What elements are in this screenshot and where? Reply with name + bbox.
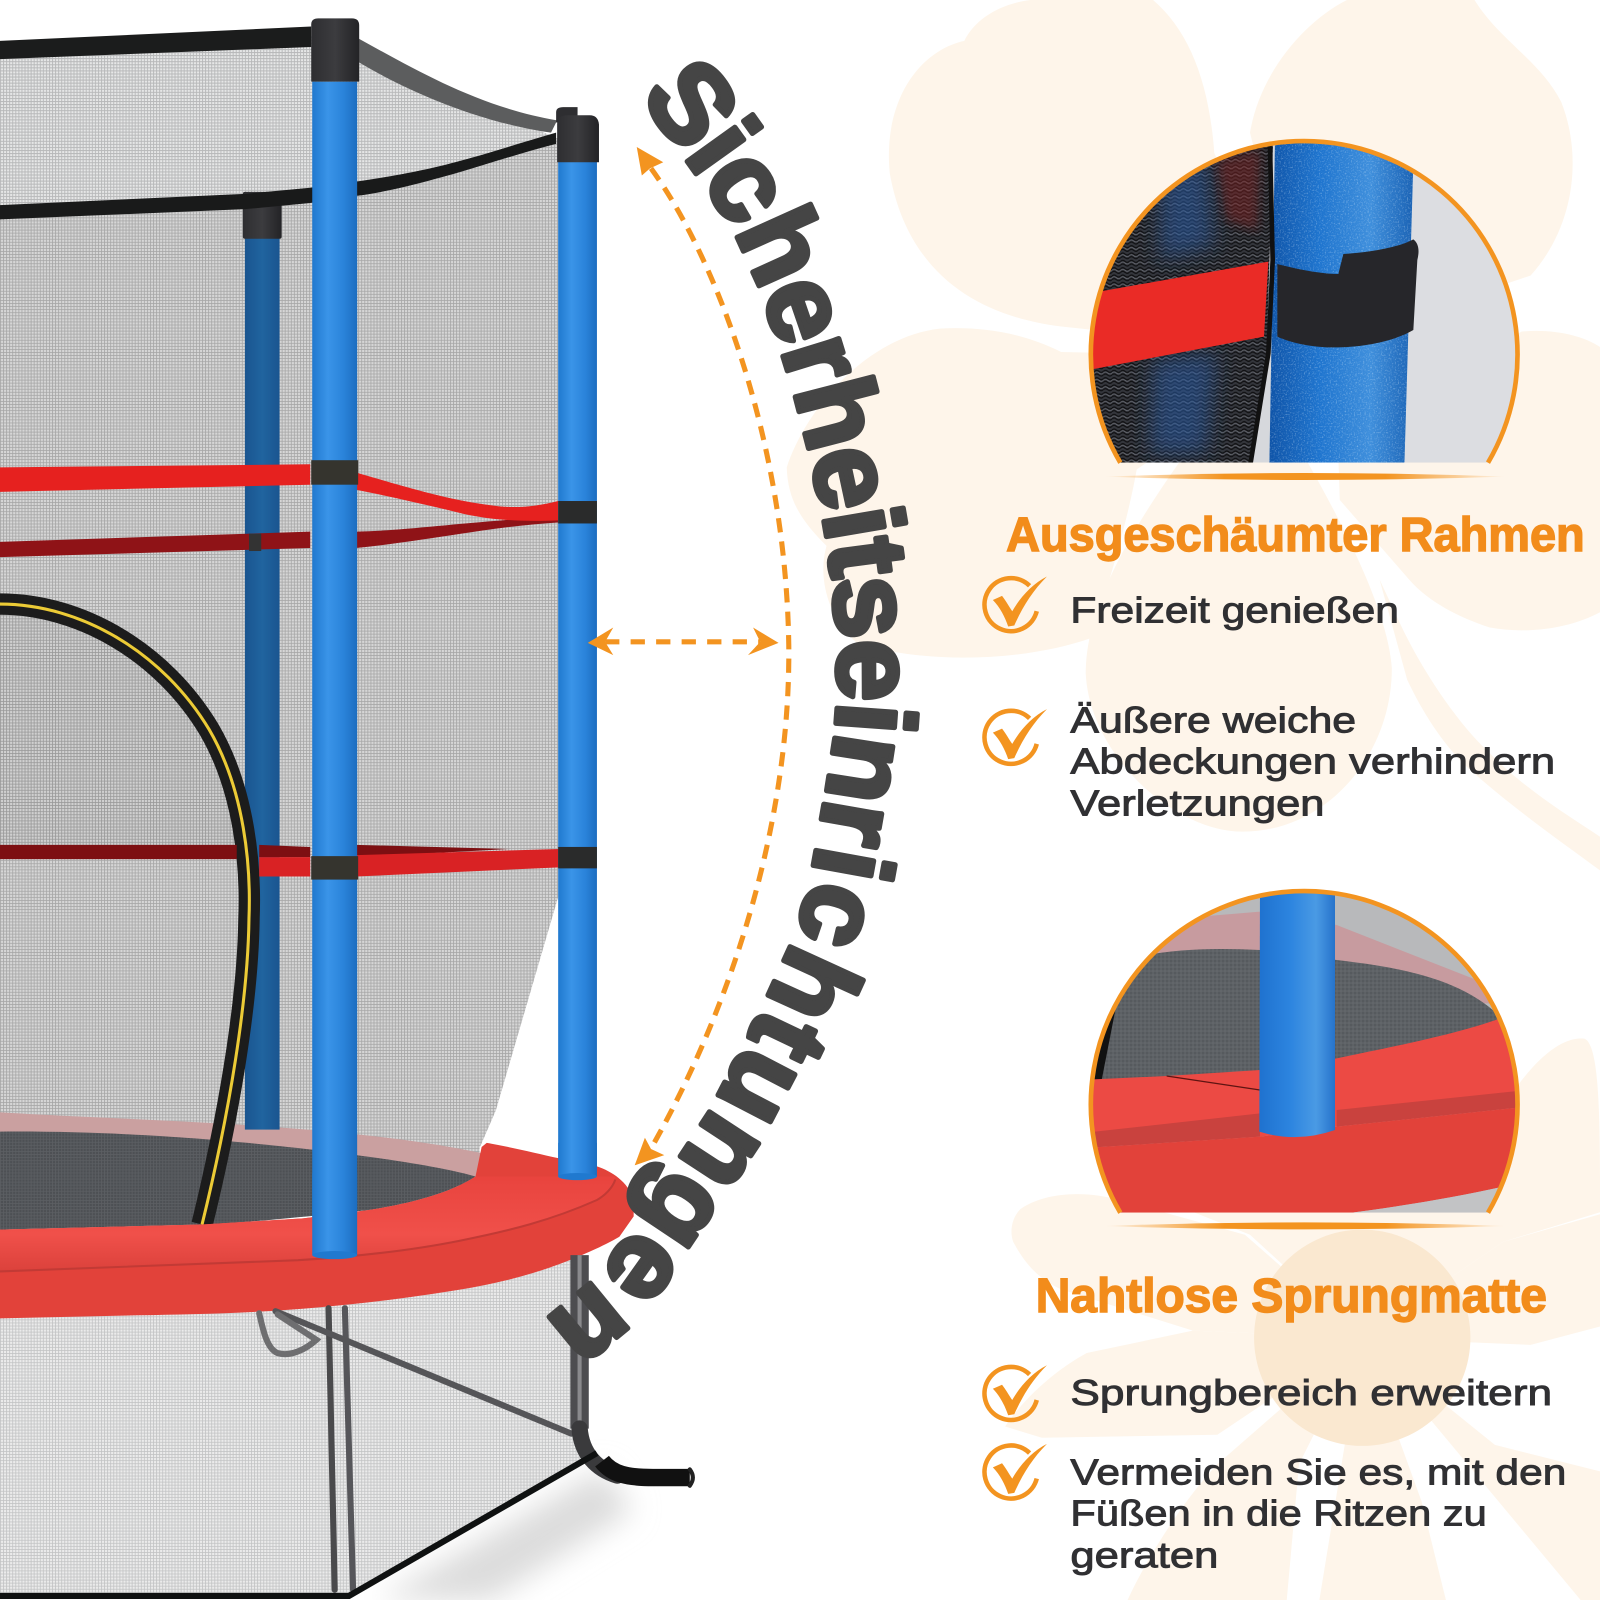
text: Vermeiden Sie es (1070, 1452, 1566, 1575)
panel 1: foam frame detail (1080, 133, 1527, 480)
net seam (1250, 147, 1273, 467)
dark mesh mat (1102, 949, 1498, 1079)
bottom arrowhead (635, 1138, 664, 1165)
dark red lower strap (0, 845, 510, 859)
pole bases over pad (312, 1143, 597, 1259)
safety net main panels (0, 138, 558, 1230)
red lower strap (259, 849, 559, 877)
panel border (1091, 891, 1518, 1213)
pink reflection of pad through net (0, 1112, 482, 1180)
small back pole strap (249, 534, 261, 551)
icon: check 4 (984, 1444, 1047, 1499)
divider (1103, 473, 1507, 480)
floor shadow (378, 1469, 633, 1600)
dark red lower strap upper (0, 516, 558, 557)
frame legs (259, 1255, 693, 1590)
text: Vermeiden Sie es: geraten (1070, 1534, 1218, 1575)
dashed arc arrow (637, 147, 789, 1145)
red pad front (1098, 1108, 1516, 1213)
ground frame line (0, 1453, 597, 1596)
background: cream flower petals (787, 0, 1600, 1600)
top rim right grey (357, 38, 557, 133)
horizontal double arrow (588, 628, 779, 655)
icon: check 3 (984, 1365, 1047, 1420)
background: flower centre circle (1254, 1230, 1470, 1446)
pad seam line (1167, 1076, 1260, 1090)
red pad (0, 1143, 634, 1318)
front pole (311, 18, 359, 1258)
trampoline illustration (0, 18, 693, 1600)
red webbing strap (1080, 262, 1268, 372)
grey net below (1354, 1188, 1498, 1212)
safety net upper band (0, 36, 558, 214)
foam pole (1269, 140, 1414, 467)
top rim back (0, 27, 311, 59)
text: Vermeiden Sie es: Füßen in die Ritzen zu (1070, 1493, 1487, 1534)
net (1094, 146, 1273, 463)
jump mat (0, 1132, 476, 1230)
panel border (1091, 141, 1518, 463)
blue pole (1259, 883, 1335, 1137)
red pad upper surface (1080, 1017, 1527, 1148)
lower net (0, 1250, 597, 1595)
heading: Ausgeschäumter Rahmen: Ausgeschäumter Rahmen (1006, 509, 1585, 562)
icon: check 2 (984, 709, 1047, 764)
pink band (1157, 912, 1490, 1004)
text: Äußere weiche (1070, 700, 1555, 823)
door zip frame (0, 604, 249, 1224)
top rim front (0, 133, 556, 219)
right pole (556, 107, 599, 1181)
text: Vermeiden Sie es: Vermeiden Sie es, mit den (1070, 1452, 1566, 1493)
heading: Nahtlose Sprungmatte: Nahtlose Sprungmatte (1036, 1270, 1547, 1323)
back pole (243, 192, 282, 1130)
red upper strap (0, 464, 558, 521)
top arrowhead (637, 147, 663, 176)
text: Äußere weiche: Abdeckungen verhindern (1070, 740, 1555, 781)
text: Äußere weiche: Äußere weiche (1070, 700, 1356, 741)
black velcro strap (1277, 239, 1419, 347)
divider (1103, 1222, 1507, 1229)
icon: check 1 (984, 577, 1047, 631)
black door edge (1094, 1010, 1116, 1080)
door interior (0, 612, 239, 847)
curved title: Sicherheitseinrichtungen (546, 61, 920, 1358)
panel 2: seamless mat detail (1080, 883, 1527, 1229)
text: Sprungbereich erweitern: Sprungbereich erweitern (1070, 1372, 1552, 1413)
text: Freizeit genießen: Freizeit genießen (1070, 589, 1399, 630)
text: Äußere weiche: Verletzungen (1070, 782, 1324, 823)
